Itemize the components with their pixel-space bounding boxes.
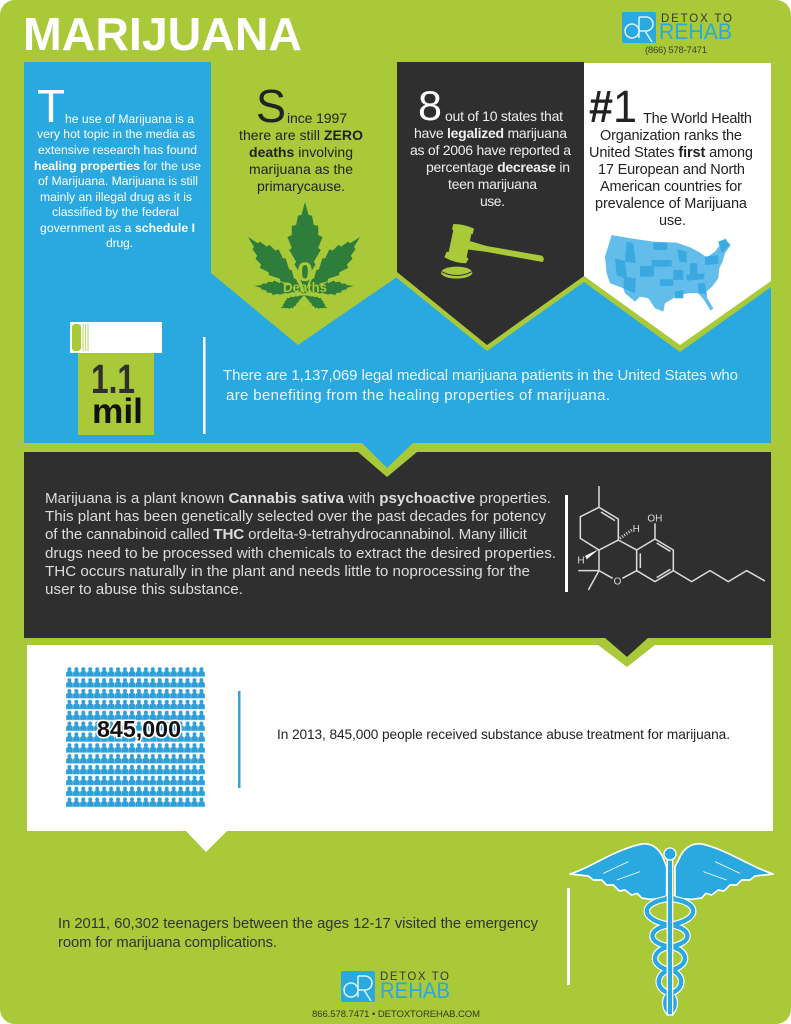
panel: white treatment statistics — [27, 645, 773, 852]
logo: top right: REHAB — [659, 19, 732, 44]
panel: intro text: extensive research has found — [38, 143, 197, 157]
description text — [45, 490, 556, 598]
patients text: are benefiting from the healing properties of marijuana. — [226, 387, 610, 404]
divider — [203, 337, 206, 434]
patients text — [223, 367, 738, 404]
ranking text: The World Health — [643, 111, 752, 127]
emergency room text: room for marijuana complications. — [58, 935, 277, 951]
ranking text — [589, 81, 753, 229]
description text: of the cannabinoid called THC ordelta-9-tetrahydrocannabinol. Many illicit — [45, 526, 528, 543]
panel: number one ranking chevron — [584, 63, 771, 352]
description text: THC occurs naturally in the plant and needs little to noprocessing for the — [45, 563, 530, 580]
legalized states text — [410, 82, 571, 209]
panel: intro text: government as a schedule I — [40, 221, 195, 235]
emergency room text — [58, 916, 539, 951]
green band under blue panel — [24, 444, 771, 477]
icon: caduceus — [570, 844, 773, 1015]
icon: THC molecule: H — [577, 555, 585, 566]
logo: footer — [341, 971, 450, 1003]
legalized states text: 8 — [418, 82, 442, 129]
panel: intro text: healing properties for the use — [34, 159, 201, 173]
icon: US map — [605, 235, 731, 312]
icon: grid of people with 845,000 — [66, 667, 205, 808]
panel: intro text: T — [37, 80, 65, 132]
panel: intro text: classified by the federal — [52, 205, 179, 219]
blue main panel — [24, 62, 771, 468]
patients text: There are 1,137,069 legal medical marijuana patients in the United States who — [223, 367, 738, 384]
description text: drugs need to be processed with chemicals to extract the desired properties. — [45, 545, 556, 562]
zero deaths text: ince 1997 — [287, 110, 347, 126]
icon: gavel — [441, 224, 544, 279]
ranking text: Organization ranks the — [600, 128, 742, 144]
icon: THC molecule: OH — [647, 513, 662, 524]
emergency room text: In 2011, 60,302 teenagers between the ages 12-17 visited the emergency — [58, 916, 539, 932]
icon: THC molecule — [577, 486, 765, 590]
legalized states text: teen marijuana — [448, 176, 537, 192]
divider — [565, 495, 568, 592]
panel: intro text: of Marijuana. Marijuana is still — [38, 174, 198, 188]
panel: intro text — [34, 80, 201, 250]
panel: zero deaths chevron — [211, 62, 397, 345]
zero deaths text: primarycause. — [257, 178, 345, 194]
icon: cannabis leaf: Deaths — [283, 279, 327, 295]
description text: Marijuana is a plant known Cannabis sativa with psychoactive properties. — [45, 490, 551, 507]
legalized states text: as of 2006 have reported a — [410, 142, 571, 158]
ranking text: American countries for — [600, 179, 742, 195]
panel: intro text: mainly an illegal drug as it is — [40, 190, 192, 204]
ranking text: #1 — [589, 81, 637, 132]
description text: This plant has been genetically selected over the past decades for potency — [45, 508, 546, 525]
panel: intro text: he use of Marijuana is a — [65, 112, 194, 126]
logo: footer: REHAB — [380, 978, 450, 1003]
panel: legalized states chevron — [397, 62, 584, 351]
logo: footer: DETOX TO — [380, 971, 449, 983]
ranking text: use. — [659, 213, 686, 229]
legalized states text: have legalized marijuana — [414, 125, 567, 141]
green band under dark panel — [24, 638, 771, 667]
ranking text: United States first among — [589, 145, 753, 161]
icon: THC molecule: H — [633, 524, 640, 535]
legalized states text: out of 10 states that — [445, 108, 563, 124]
icon: grid of people with 845,000: 845,000 — [97, 716, 181, 742]
divider — [238, 691, 240, 788]
legalized states text: use. — [480, 193, 505, 209]
divider — [567, 888, 570, 985]
logo: top right — [622, 12, 732, 56]
ranking text: prevalence of Marijuana — [595, 196, 748, 212]
zero deaths text: there are still ZERO — [239, 127, 363, 143]
icon: pill bottle with 1.1 mil: mil — [92, 392, 143, 431]
ranking text: 17 European and North — [598, 162, 745, 178]
treatment text: In 2013, 845,000 people received substance abuse treatment for marijuana. — [277, 727, 730, 742]
logo: top right: (866) 578-7471 — [645, 45, 707, 56]
zero deaths text: deaths involving — [249, 144, 353, 160]
icon: cannabis leaf: 0 — [297, 257, 313, 287]
panel: intro text: very hot topic in the media as — [37, 127, 195, 141]
panel: intro text: drug. — [106, 236, 133, 250]
title: MARIJUANA — [23, 8, 302, 60]
zero deaths text: marijuana as the — [249, 161, 353, 177]
icon: pill bottle with 1.1 mil — [70, 322, 162, 435]
description text: user to abuse this substance. — [45, 581, 243, 598]
legalized states text: percentage decrease in — [426, 159, 570, 175]
zero deaths text — [239, 80, 363, 194]
panel: dark cannabis description — [24, 452, 771, 657]
icon: THC molecule: O — [614, 577, 622, 588]
icon: pill bottle with 1.1 mil: 1.1 — [91, 356, 135, 402]
zero deaths text: S — [256, 80, 286, 132]
icon: cannabis leaf — [239, 202, 369, 314]
logo: top right: DETOX TO — [661, 13, 732, 25]
footer contact line: 866.578.7471 • DETOXTOREHAB.COM — [312, 1009, 480, 1020]
